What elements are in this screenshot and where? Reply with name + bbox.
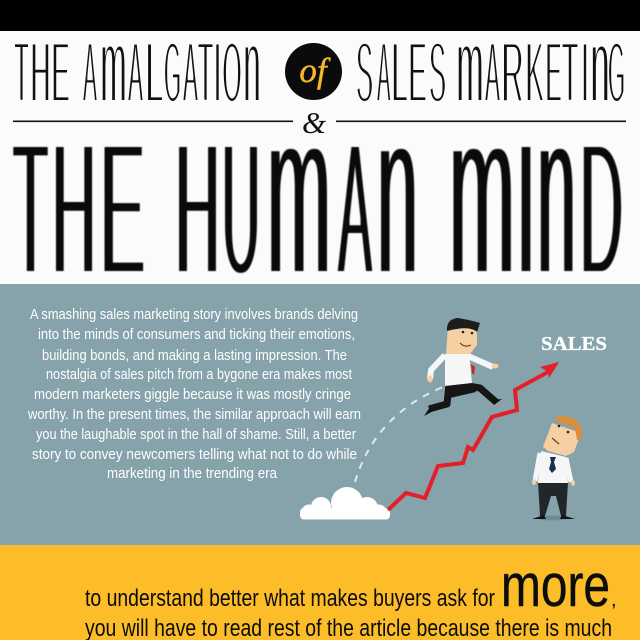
title line one: A — [83, 25, 97, 121]
divider rules with ampersand: & — [302, 105, 326, 140]
title line one: K — [526, 25, 544, 121]
text block: intro: modern marketers giggle because it was mostly cringe — [34, 387, 351, 403]
icon: cloud — [300, 487, 390, 520]
title line one: T — [562, 25, 578, 121]
title line one: L — [392, 25, 408, 121]
title line one: I — [582, 25, 588, 121]
text block: intro — [27, 307, 361, 482]
title line one: n — [244, 5, 260, 125]
title line two: T — [13, 104, 48, 315]
title line one: H — [30, 25, 50, 121]
title line two — [13, 60, 623, 325]
text block: intro: building bonds, and making a lasting impression. The — [42, 348, 347, 364]
icon: of badge: of — [299, 51, 331, 90]
text block: call to action: to understand better what makes buyers ask for — [85, 585, 495, 612]
panel: yellow call to action — [0, 545, 640, 640]
arrow: red sales growth line — [388, 362, 559, 510]
panel: sales story — [0, 284, 640, 545]
text block: call to action: more — [501, 552, 610, 619]
title line one: T — [198, 25, 213, 121]
figure: standing businessman — [532, 416, 582, 520]
title line two: n — [377, 60, 418, 325]
title line one: L — [146, 25, 163, 121]
title line one: T — [14, 25, 28, 121]
title line two: E — [100, 104, 145, 315]
title line two: A — [338, 104, 372, 315]
text block: intro: you the laughable spot in the hall of shame. Still, a better — [36, 427, 356, 443]
title line two: I — [516, 104, 536, 315]
icon: of badge — [285, 43, 342, 100]
title line one: G — [164, 25, 181, 121]
title line one: E — [52, 25, 70, 121]
dashed jump arc — [355, 387, 443, 482]
text block: call to action: , — [611, 589, 617, 611]
title line one: A — [183, 25, 198, 121]
text block: intro: nostalgia of sales pitch from a bygone era makes most — [46, 367, 352, 383]
top black band — [0, 0, 640, 31]
title line one: E — [408, 25, 426, 121]
panel: title header — [13, 5, 626, 325]
title line one: A — [128, 25, 143, 121]
title line two: H — [175, 104, 220, 315]
figure: jumping businessman — [424, 318, 502, 416]
title line two: U — [222, 104, 260, 315]
title line one: A — [485, 25, 500, 121]
text block: intro: A smashing sales marketing story involves brands delving — [30, 307, 358, 323]
title line one: m — [456, 5, 484, 125]
text block: intro: story to convey newcomers telling what not to do while — [32, 447, 357, 463]
title line one: E — [546, 25, 562, 121]
title line one: S — [356, 25, 373, 121]
title line two: H — [52, 104, 96, 315]
title line one: m — [100, 5, 126, 125]
title line one: A — [377, 25, 391, 121]
label: sales: SALES — [541, 333, 607, 355]
text block: intro: marketing in the trending era — [107, 466, 278, 482]
title line two: m — [267, 60, 331, 325]
text block: intro: into the minds of consumers and ticking their emotions, — [38, 327, 355, 343]
title line one: R — [502, 25, 524, 121]
title line one: O — [222, 25, 242, 121]
text block: call to action — [85, 552, 617, 640]
text block: intro: worthy. In the present times, the similar approach will earn — [27, 407, 361, 423]
title line one: S — [429, 25, 446, 121]
title line one — [14, 5, 625, 125]
title line one: I — [214, 25, 221, 121]
